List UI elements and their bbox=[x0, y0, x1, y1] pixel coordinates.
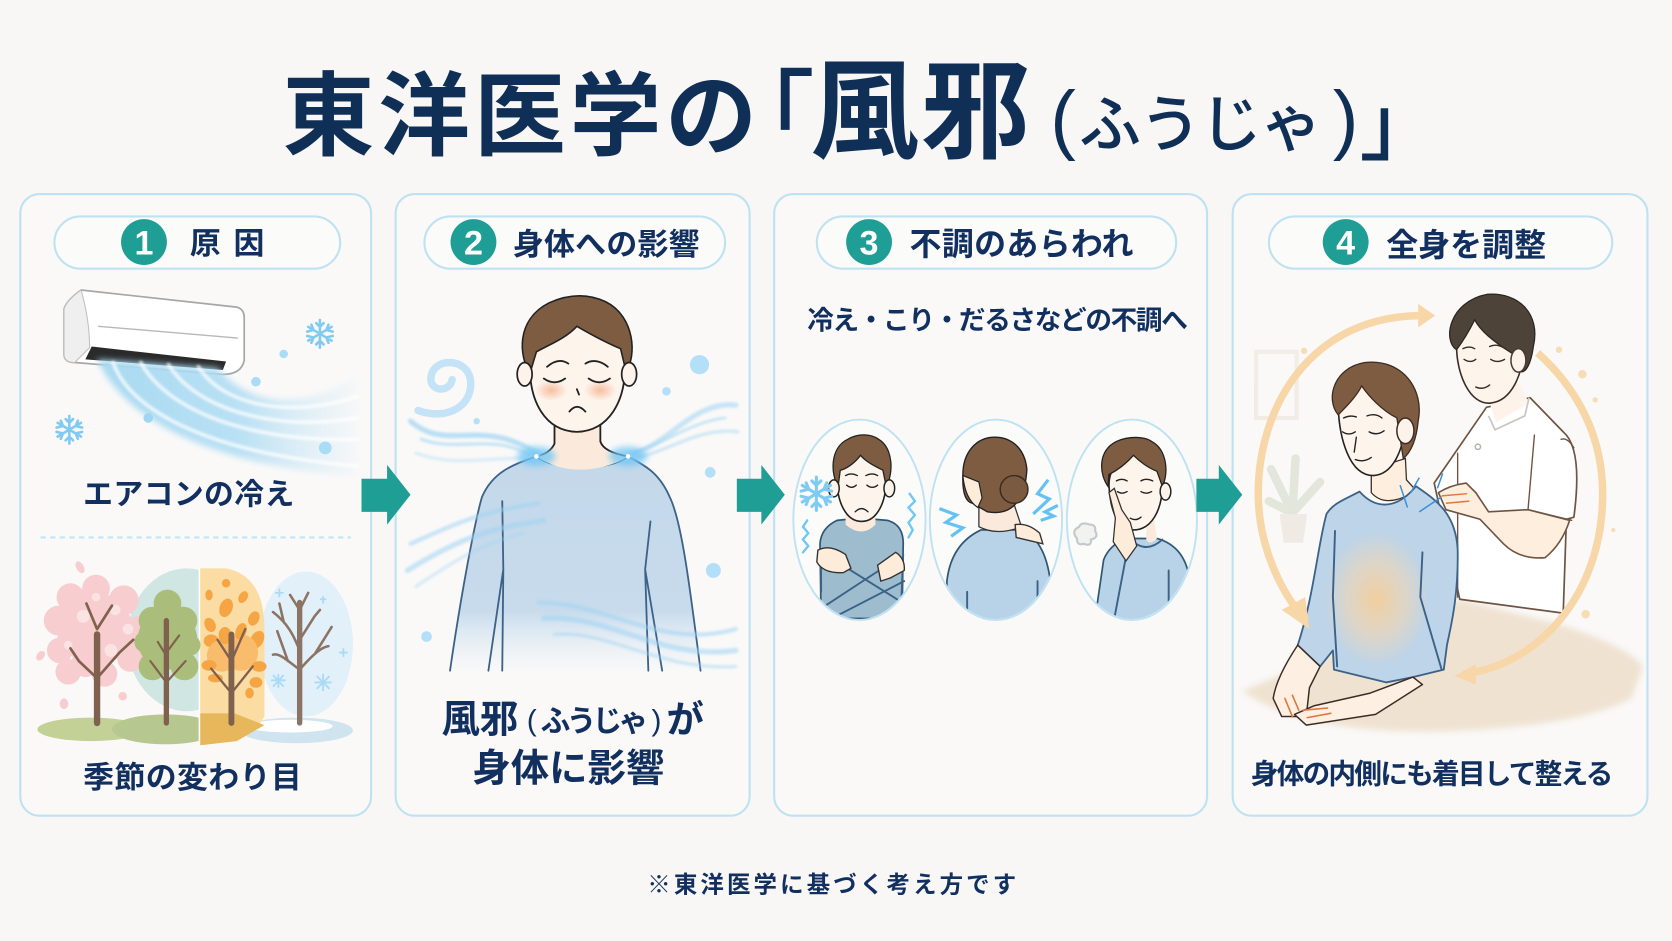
text: 風邪（ふうじゃ）が: 風邪 bbox=[441, 699, 518, 742]
text: 身体の内側にも着目して整える: 身体の内側にも着目して整える bbox=[1251, 759, 1613, 790]
cold wind streams bbox=[407, 405, 738, 667]
panel: 原因 bbox=[20, 194, 371, 816]
title: 風邪 bbox=[810, 52, 1030, 173]
cold airflow bbox=[97, 350, 357, 477]
heading: 身体への影響: 身体への影響 bbox=[513, 227, 700, 262]
illustration: four seasons trees bbox=[34, 560, 353, 745]
title: ) bbox=[1333, 77, 1358, 162]
heading: 身体への影響: 2 bbox=[464, 224, 483, 262]
title: 」 bbox=[1360, 82, 1441, 172]
icon: air conditioner bbox=[64, 290, 244, 374]
title: 東洋医学の bbox=[283, 66, 757, 168]
footnote: ※東洋医学に基づく考え方です bbox=[647, 871, 1016, 897]
illustration: treatment scene bbox=[1242, 294, 1643, 732]
facial features bbox=[544, 361, 610, 412]
text: 季節の変わり目: 季節の変わり目 bbox=[83, 760, 302, 795]
hair bbox=[522, 296, 632, 373]
text: 風邪（ふうじゃ）が bbox=[441, 699, 704, 742]
heading: 不調のあらわれ: 不調のあらわれ bbox=[910, 226, 1134, 262]
title: ふうじゃ bbox=[1079, 91, 1322, 160]
wind swirl bbox=[418, 363, 471, 414]
heading: 全身を調整: 全身を調整 bbox=[1386, 227, 1546, 263]
heading: 全身を調整 bbox=[1269, 216, 1612, 269]
heading: 全身を調整: 4 bbox=[1336, 224, 1355, 262]
illustration: person affected by wind bbox=[407, 296, 738, 671]
heading: 身体への影響 bbox=[424, 216, 725, 269]
illustration: fatigue bbox=[1067, 420, 1197, 624]
faint frame and plant bbox=[1256, 352, 1320, 543]
neck and face bbox=[536, 418, 628, 470]
panel: 身体への影響 bbox=[396, 194, 750, 816]
heading: 原因: 原 因 bbox=[190, 226, 264, 261]
illustration: chills bbox=[793, 420, 926, 620]
circulation arrows bbox=[1258, 316, 1603, 674]
arrow bbox=[1196, 465, 1242, 525]
text: エアコンの冷え: エアコンの冷え bbox=[83, 478, 294, 511]
panel: 全身を調整 bbox=[1233, 194, 1647, 816]
text: 風邪（ふうじゃ）が: ふうじゃ bbox=[541, 705, 648, 738]
table bbox=[1242, 599, 1643, 732]
patient bbox=[1273, 362, 1458, 725]
heading: 原因: 1 bbox=[134, 224, 153, 262]
icon: snowflake bbox=[57, 416, 82, 444]
shoulder chill glows bbox=[517, 447, 647, 466]
text: 風邪（ふうじゃ）が: ) bbox=[652, 704, 661, 737]
sweater bbox=[450, 456, 701, 671]
heading: 原因 bbox=[54, 216, 340, 269]
text: 冷え・こり・だるさなどの不調へ: 冷え・こり・だるさなどの不調へ bbox=[807, 305, 1188, 335]
illustration: stiff neck bbox=[930, 420, 1062, 624]
title: ( bbox=[1050, 77, 1076, 162]
therapist bbox=[1434, 294, 1577, 613]
heading: 不調のあらわれ bbox=[817, 216, 1176, 269]
text: 風邪（ふうじゃ）が: ( bbox=[527, 704, 537, 737]
arrow bbox=[362, 465, 411, 525]
title bbox=[283, 52, 1441, 173]
icon: snowflake bbox=[307, 320, 333, 348]
heading: 不調のあらわれ: 3 bbox=[860, 224, 879, 262]
text: 風邪（ふうじゃ）が: が bbox=[666, 699, 704, 741]
arrow bbox=[737, 465, 785, 525]
panel: 不調のあらわれ bbox=[774, 194, 1207, 816]
title: 「 bbox=[719, 63, 815, 170]
text: 身体に影響: 身体に影響 bbox=[472, 748, 664, 791]
